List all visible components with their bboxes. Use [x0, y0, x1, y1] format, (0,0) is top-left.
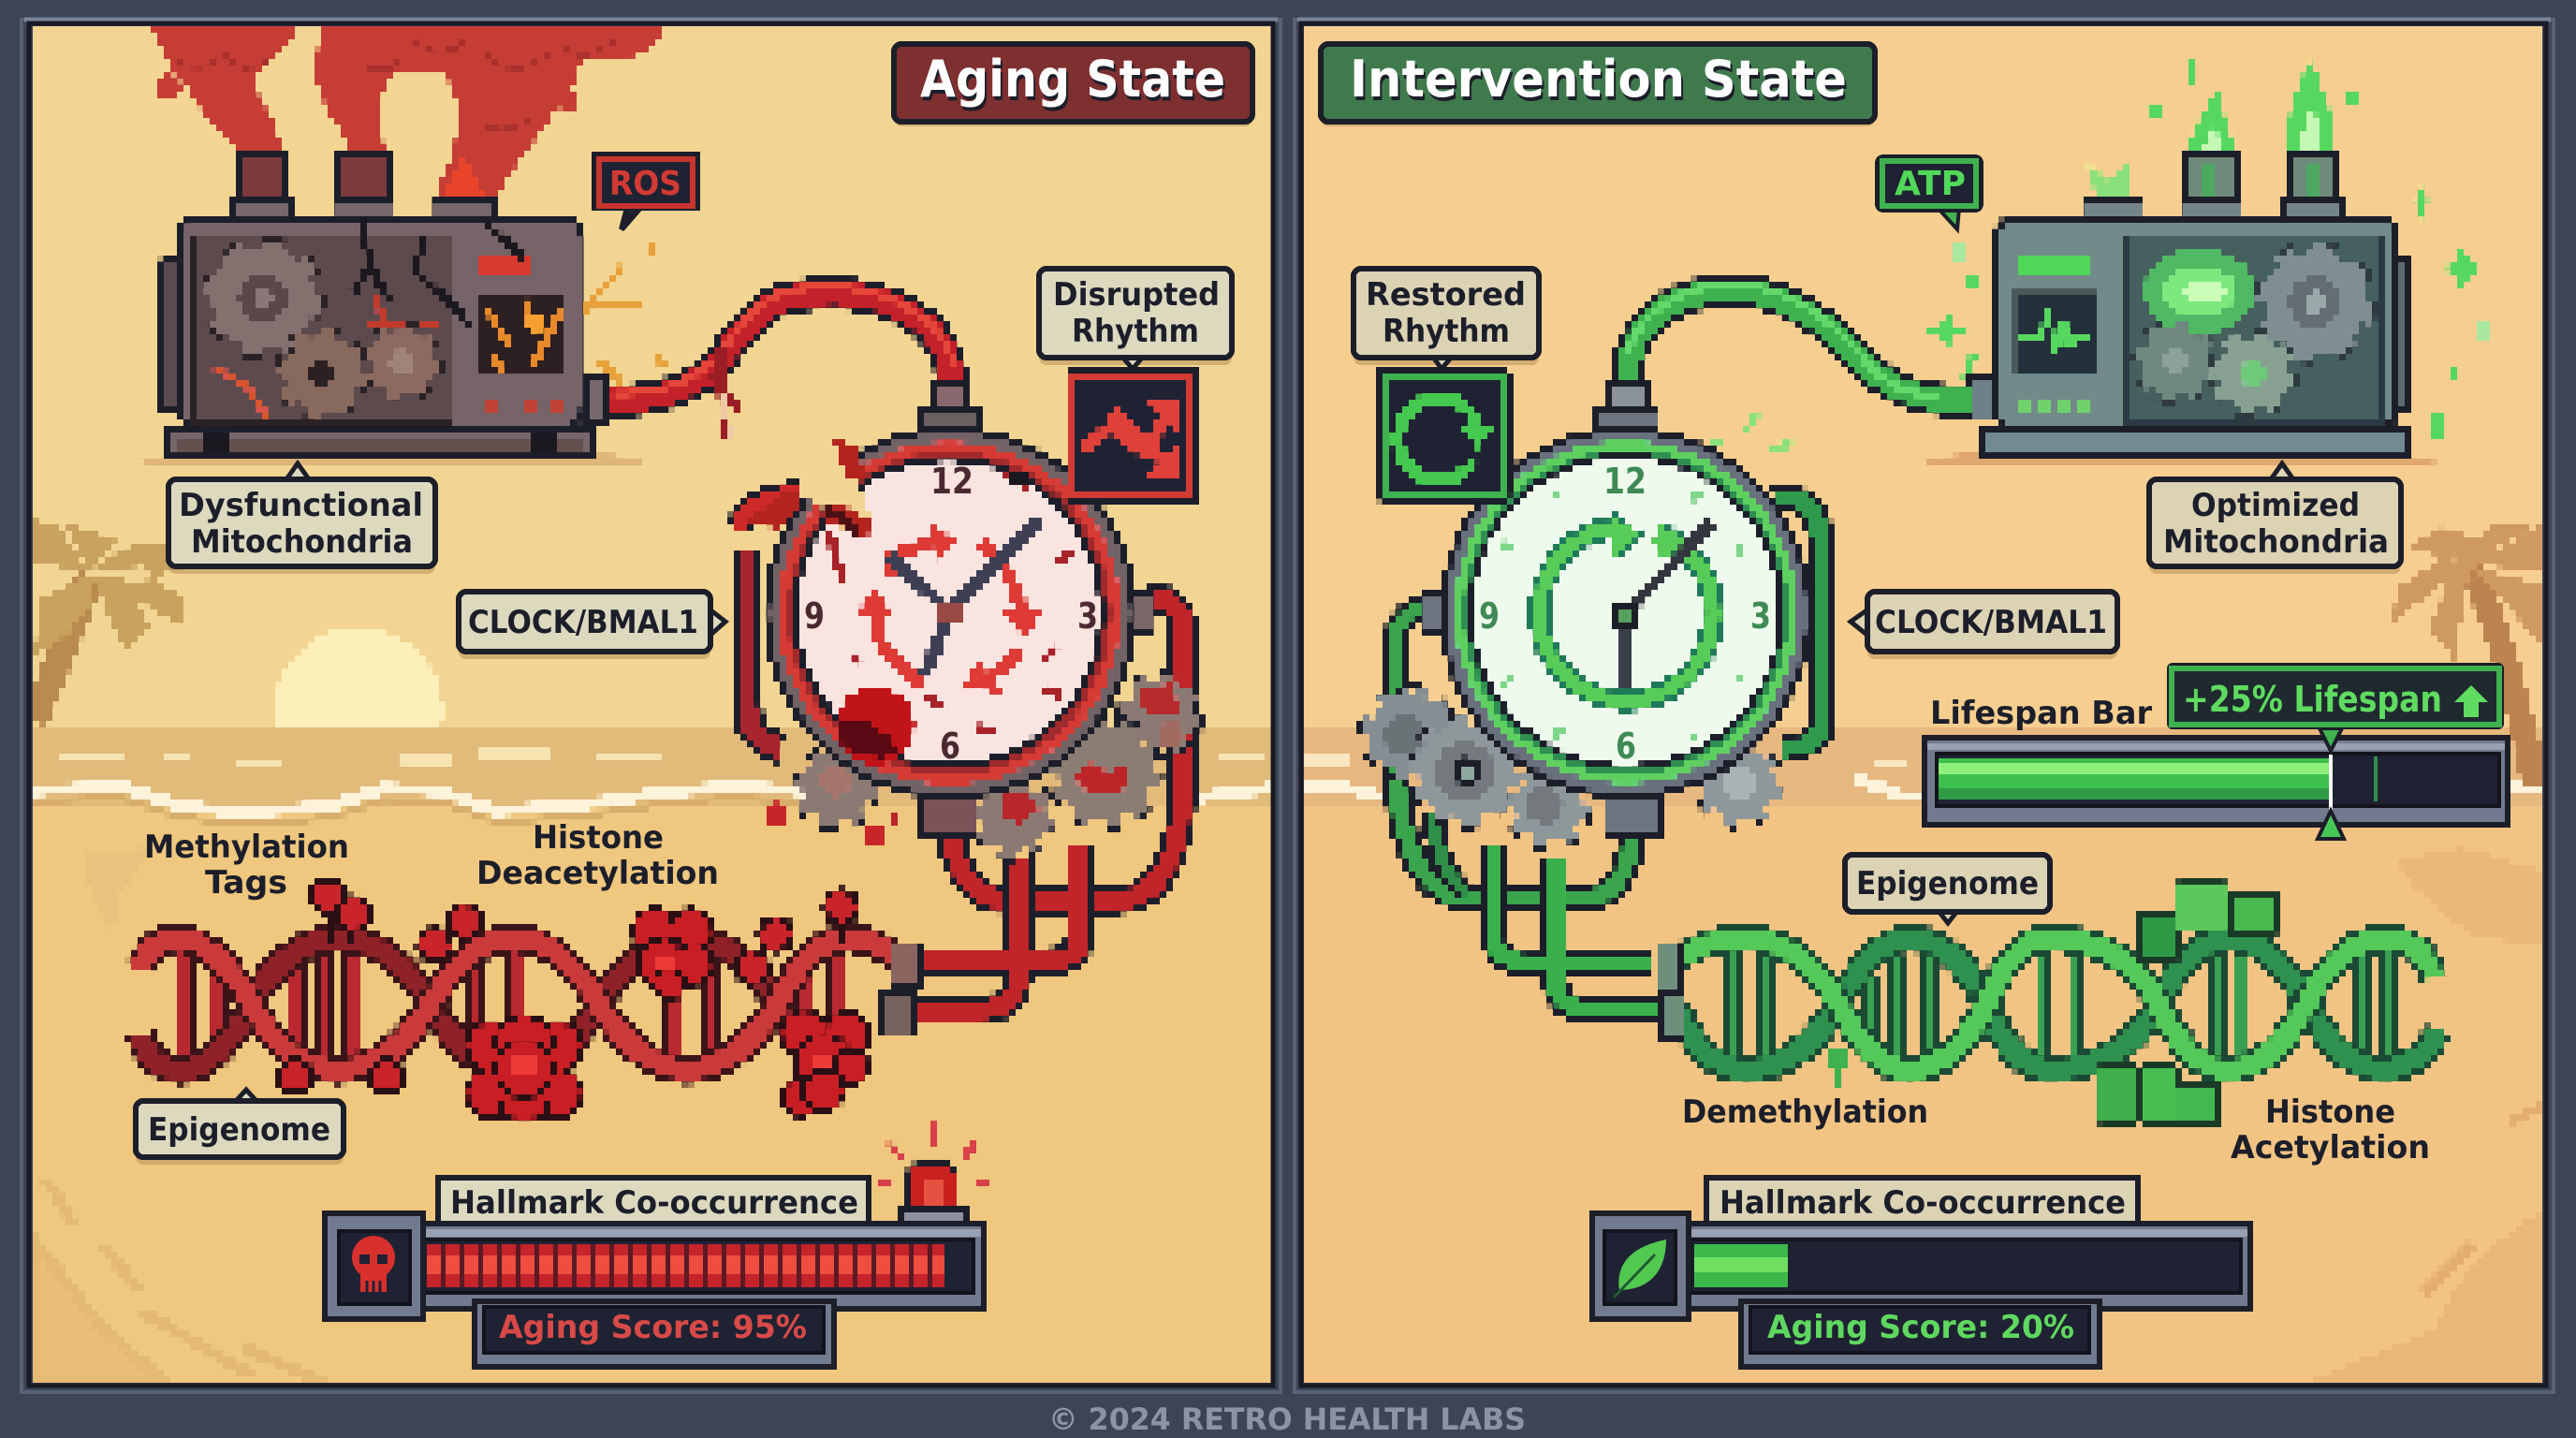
label: restored rhythm: Rhythm	[1383, 313, 1510, 350]
icon: leaf	[1592, 1213, 1689, 1319]
clock numerals: intervention: 3	[1750, 595, 1771, 637]
label: methylation tags: Tags	[205, 864, 287, 902]
lifespan bar label: Lifespan Bar	[1930, 695, 2152, 732]
histone blocks: acetylated	[2097, 884, 2277, 1125]
green flames and sparkles	[1925, 56, 2490, 436]
label: methylation tags: Methylation	[144, 829, 349, 866]
label: ATP: ATP	[1895, 165, 1966, 203]
pipe: mitochondria to clock	[607, 286, 955, 440]
aging score readout	[475, 1301, 834, 1367]
lifespan gauge	[1925, 738, 2508, 825]
title: aging state	[894, 44, 1252, 126]
label: optimized mitochondria	[2149, 463, 2401, 574]
label: histone acetylation: Acetylation	[2231, 1129, 2430, 1167]
clock tubes: aging	[739, 494, 1182, 1010]
clock numerals: intervention: 9	[1479, 595, 1500, 637]
beach background	[1303, 25, 2544, 1384]
gauge tab: Hallmark Co-occurrence	[1720, 1184, 2126, 1222]
label: disrupted rhythm: Disrupted	[1053, 276, 1220, 314]
footer credit: © 2024 RETRO HEALTH LABS	[1048, 1401, 1526, 1437]
clock numerals: intervention: 6	[1616, 726, 1636, 767]
machine: optimized mitochondria	[1914, 156, 2448, 468]
icon: disrupted rhythm	[1068, 369, 1195, 503]
DNA helix: aging	[140, 938, 919, 1070]
panel: aging state	[22, 20, 1281, 1392]
palm tree	[34, 520, 187, 721]
label: histone deacetylation: Deacetylation	[476, 855, 719, 892]
label: histone deacetylation	[476, 819, 719, 892]
clock hands	[1624, 522, 1713, 615]
label: CLOCK/BMAL1 intervention	[1851, 592, 2117, 659]
clock hands	[887, 520, 1039, 677]
clock: restored	[1423, 385, 1809, 833]
clock numerals: intervention	[1479, 461, 1771, 767]
clock numerals: aging: 3	[1077, 595, 1098, 637]
methylation tags	[279, 879, 858, 1093]
label: epigenome intervention	[1845, 855, 2050, 923]
gauge bar	[421, 1224, 984, 1309]
title: intervention state: Intervention State	[1350, 50, 1847, 109]
beach background	[31, 25, 1271, 1384]
gears: broken	[764, 681, 1194, 851]
panel: intervention state	[1295, 20, 2554, 1392]
aging panel artwork	[31, 25, 1271, 1384]
lifespan badge: +25% Lifespan	[2183, 679, 2442, 720]
clock numerals: aging: 12	[930, 461, 973, 502]
clock tubes: intervention	[1395, 497, 1822, 1010]
panel frame: aging	[22, 20, 1281, 1392]
aging score readout: Aging Score: 20%	[1767, 1309, 2074, 1346]
title: aging state: Aging State	[920, 50, 1225, 109]
intervention panel artwork	[1303, 25, 2544, 1384]
smoke plumes	[152, 25, 666, 201]
label: disrupted rhythm	[1039, 269, 1232, 369]
title: aging state: Aging State	[922, 53, 1227, 112]
label: histone acetylation: Histone	[2265, 1093, 2395, 1131]
clock numerals: aging: 6	[940, 726, 960, 767]
lifespan badge	[2167, 663, 2504, 751]
palm tree	[2389, 523, 2544, 786]
label: ATP	[1878, 157, 1981, 229]
label: restored rhythm	[1354, 269, 1539, 369]
label: demethylation: Demethylation	[1682, 1093, 1928, 1131]
label: ROS	[594, 154, 697, 229]
clock arrows: scrambled	[852, 522, 1046, 694]
siren	[878, 1122, 987, 1225]
label: disrupted rhythm: Rhythm	[1072, 313, 1199, 350]
label: epigenome aging: Epigenome	[148, 1111, 330, 1149]
label: histone acetylation	[2231, 1093, 2430, 1167]
clock numerals: aging: 9	[804, 595, 825, 637]
lifespan bar	[1925, 663, 2508, 839]
label: dysfunctional mitochondria: Mitochondria	[191, 523, 413, 561]
label: histone deacetylation: Histone	[533, 819, 664, 857]
hallmark gauge: intervention	[1592, 1178, 2250, 1367]
clock: damaged	[739, 385, 1154, 833]
clock numerals: intervention: 12	[1603, 461, 1647, 502]
gauge tab: Hallmark Co-occurrence	[450, 1184, 858, 1222]
lifespan marker	[2318, 811, 2344, 839]
label: methylation tags	[144, 829, 349, 902]
label: ROS: ROS	[609, 165, 681, 203]
clock arrow: restored cycle	[1540, 513, 1714, 700]
label: CLOCK/BMAL1 intervention: CLOCK/BMAL1	[1875, 604, 2107, 641]
label: epigenome intervention: Epigenome	[1856, 865, 2039, 902]
hallmark gauge: aging	[325, 1178, 984, 1367]
icon: restored rhythm	[1378, 371, 1508, 500]
label: dysfunctional mitochondria: Dysfunctional	[179, 487, 423, 524]
machine: dysfunctional mitochondria	[131, 156, 655, 468]
label: dysfunctional mitochondria	[168, 463, 435, 574]
gears: healthy	[1369, 694, 1775, 841]
label: restored rhythm: Restored	[1366, 276, 1526, 314]
label: optimized mitochondria: Mitochondria	[2163, 523, 2389, 561]
title: intervention state	[1321, 44, 1875, 126]
clock numerals: aging	[804, 461, 1098, 767]
title: intervention state: Intervention State	[1352, 53, 1849, 112]
gauge bar	[1689, 1224, 2250, 1309]
histone clusters	[466, 909, 870, 1122]
label: CLOCK/BMAL1 aging: CLOCK/BMAL1	[468, 604, 698, 641]
sparks	[585, 245, 666, 386]
DNA helix: intervention	[1658, 938, 2438, 1088]
panel frame: intervention	[1295, 20, 2554, 1392]
icon: skull	[325, 1213, 423, 1319]
label: optimized mitochondria: Optimized	[2191, 487, 2360, 524]
aging score readout	[1741, 1301, 2100, 1367]
label: CLOCK/BMAL1 aging	[459, 592, 725, 659]
pipe: mitochondria to clock	[1627, 284, 1971, 401]
label: epigenome aging	[136, 1090, 344, 1165]
aging score readout: Aging Score: 95%	[499, 1309, 807, 1346]
